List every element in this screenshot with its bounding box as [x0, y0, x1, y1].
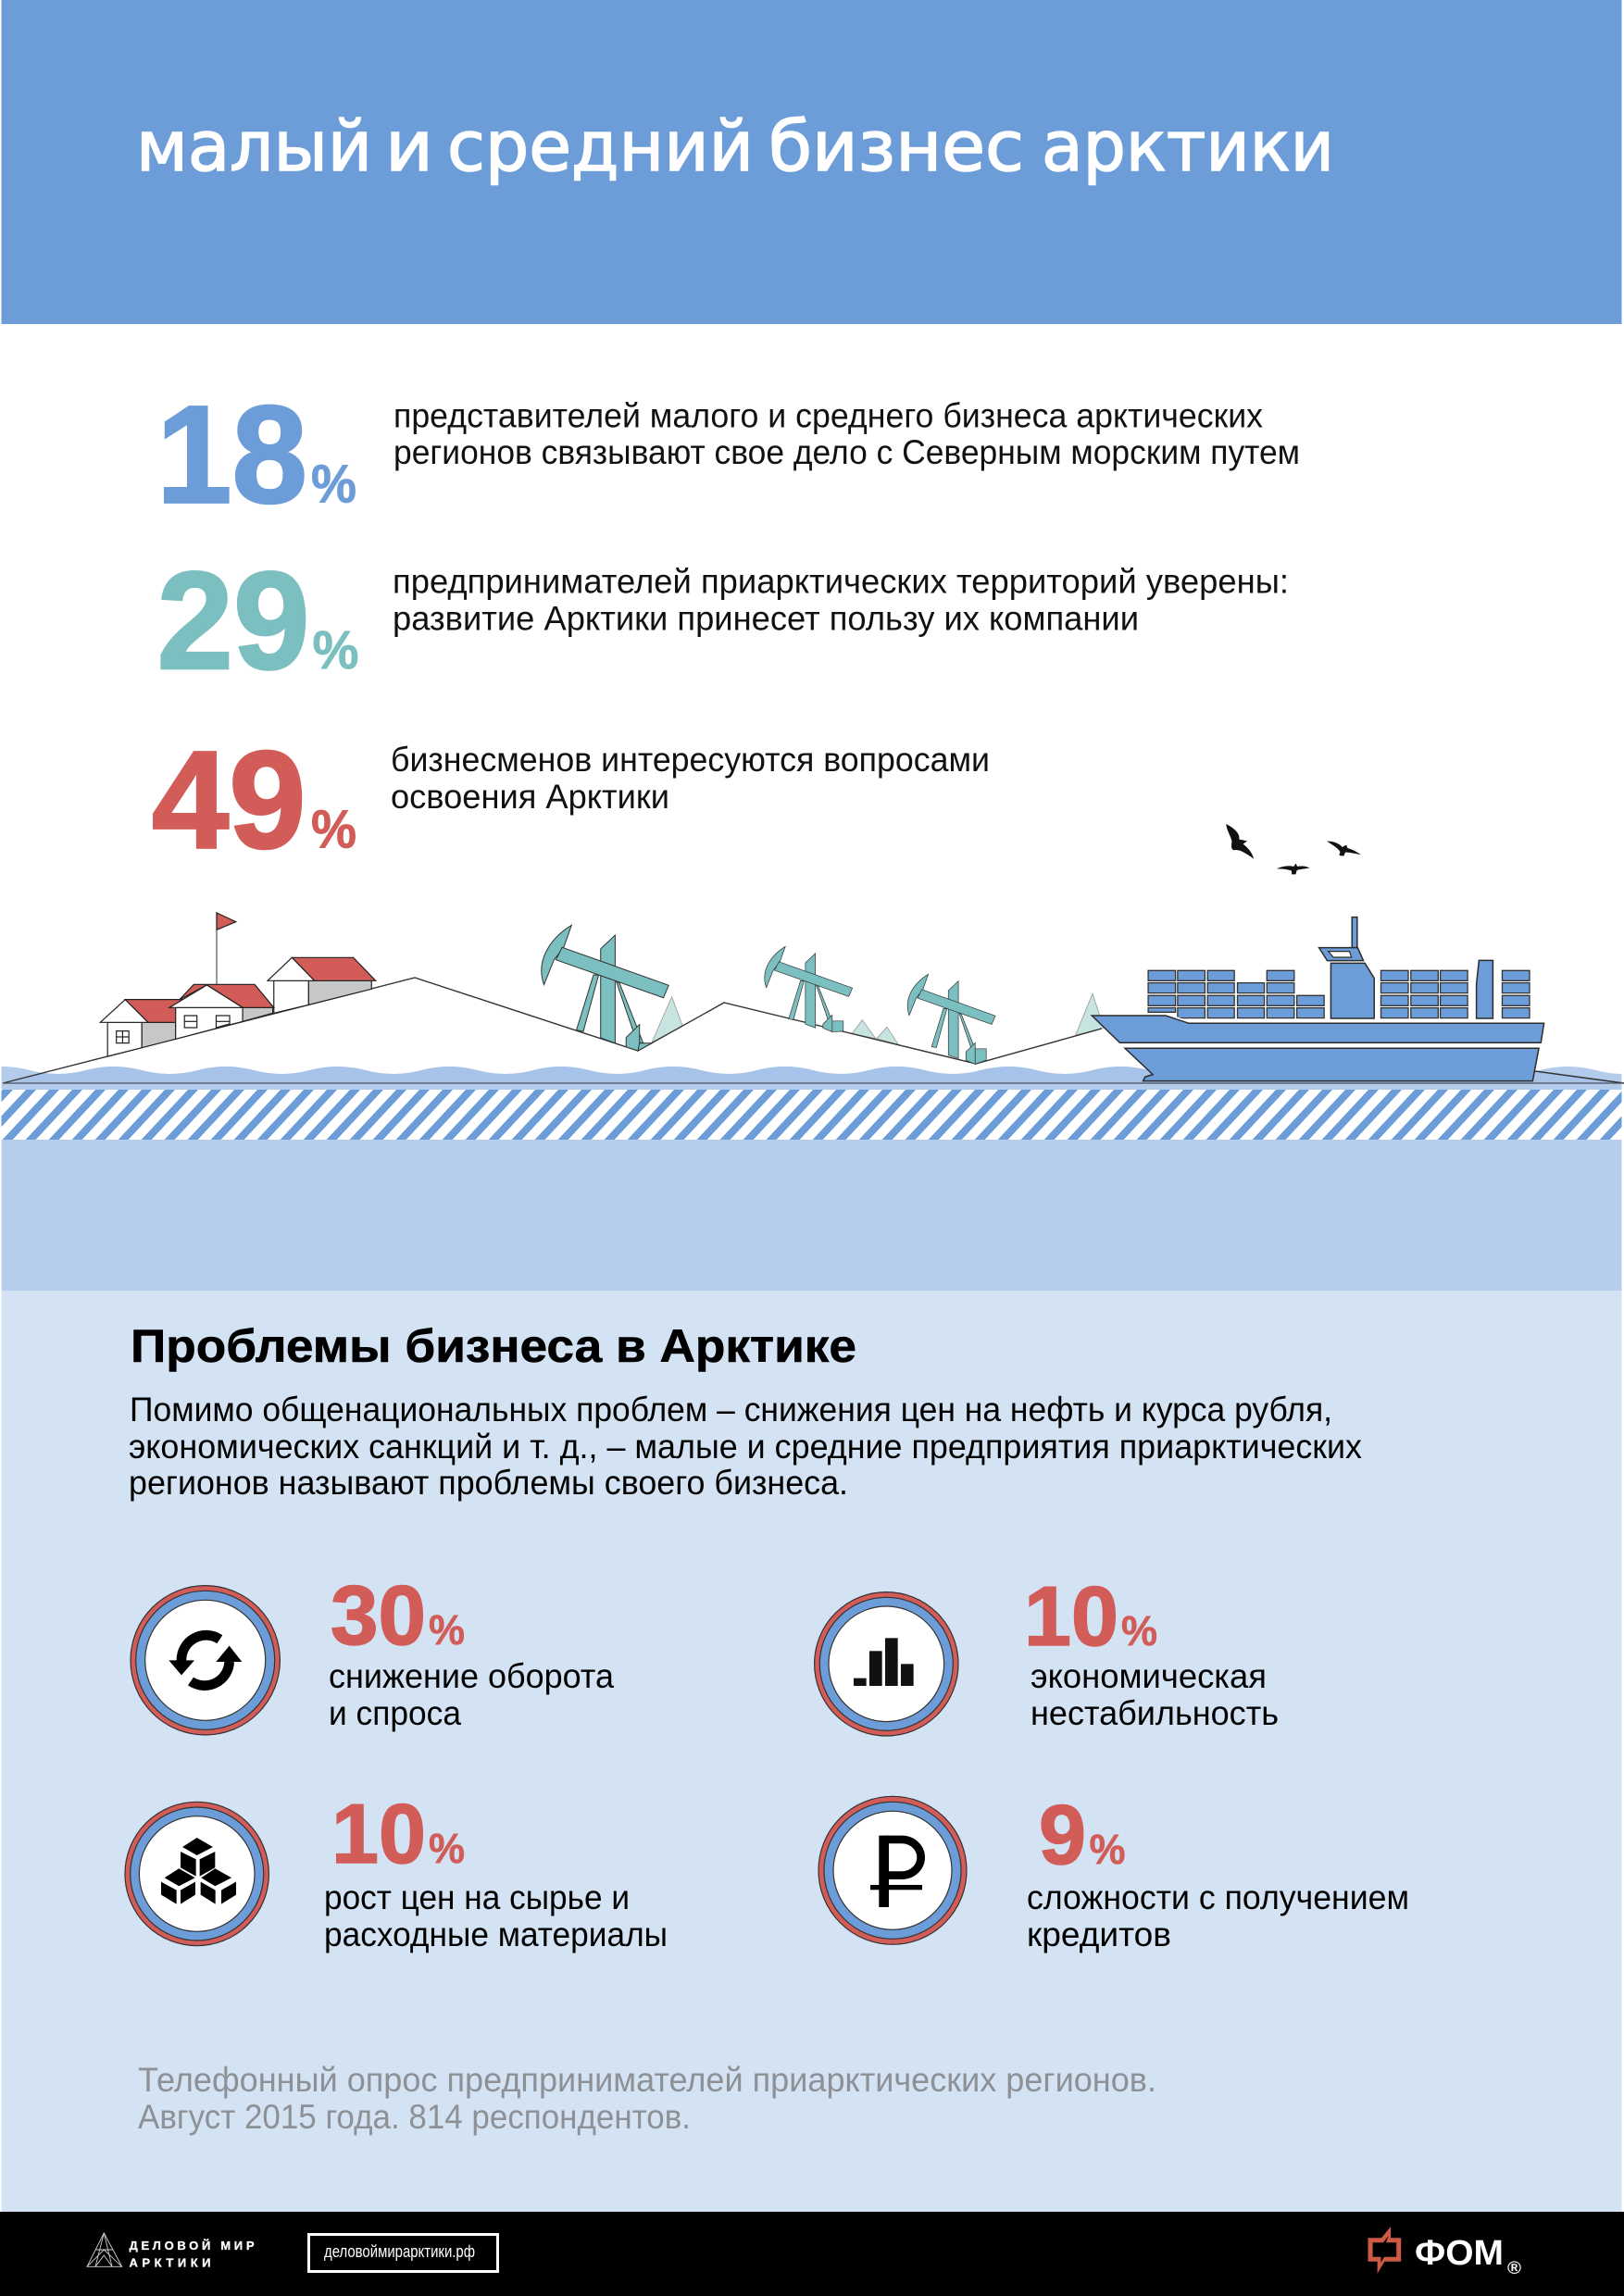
stat: 18 percent: 18	[156, 377, 307, 532]
stat: 29 percent: развитие Арктики принесет пользу их компании	[393, 599, 1139, 637]
problem: turnover: и спроса	[329, 1694, 461, 1732]
stat: 49 percent: %	[311, 800, 356, 860]
illustration: arctic landscape	[0, 824, 1624, 1291]
left house	[100, 1000, 181, 1056]
problem: credit: сложности с получением	[1027, 1878, 1409, 1916]
water waves	[0, 1067, 1624, 1090]
source note: Август 2015 года. 814 респондентов.	[138, 2098, 691, 2136]
logo: Delovoy Mir Arktiki: АРКТИКИ	[130, 2255, 211, 2269]
hill outline	[3, 978, 1102, 1083]
waterline	[3, 1082, 1624, 1084]
logo: Delovoy Mir Arktiki: ДЕЛОВОЙ МИР	[130, 2239, 255, 2252]
flag	[217, 912, 236, 985]
source note: Телефонный опрос предпринимателей приарктических регионов.	[138, 2061, 1156, 2099]
icon: cubes	[125, 1802, 269, 1946]
problem: raw materials: расходные материалы	[324, 1915, 668, 1953]
problem: credit: 9	[1039, 1789, 1086, 1882]
title: малый	[136, 106, 372, 187]
icon: FOM mark	[1368, 2227, 1401, 2274]
stat: 18 percent: представителей малого и среднего бизнеса арктических	[394, 397, 1263, 435]
problem: turnover: 30	[331, 1569, 426, 1663]
problem: credit: %	[1089, 1826, 1126, 1873]
section heading: Проблемы бизнеса в Арктике	[131, 1320, 856, 1372]
stat: 49 percent: 49	[152, 722, 306, 878]
source note	[138, 2061, 1156, 2136]
problem: turnover	[131, 1569, 614, 1735]
stat: 18 percent: регионов связывают свое дело с Северным морским путем	[394, 433, 1300, 471]
stat: 18 percent: %	[311, 455, 356, 515]
problem: raw materials: 10	[331, 1788, 426, 1881]
icebergs	[652, 993, 1104, 1044]
title	[136, 106, 1334, 187]
panel: business problems	[2, 1291, 1622, 2213]
oil pump 1	[542, 925, 668, 1051]
title: бизнес	[768, 106, 1024, 187]
problem: turnover: %	[429, 1606, 465, 1653]
stat: 29 percent: предпринимателей приарктических территорий уверены:	[393, 563, 1289, 600]
icon: ruble	[818, 1796, 967, 1944]
oil pump 2	[765, 946, 853, 1032]
problem: credit: кредитов	[1027, 1915, 1171, 1953]
stat: 49 percent	[152, 722, 990, 878]
houses and flag	[100, 912, 376, 1056]
footer	[0, 2212, 1624, 2296]
problem: economic instability: 10	[1024, 1570, 1118, 1664]
logo: FOM: ФОМ	[1415, 2234, 1504, 2273]
logo: Delovoy Mir Arktiki	[87, 2233, 255, 2269]
back house	[268, 957, 376, 1013]
problem: turnover: снижение оборота	[329, 1657, 614, 1695]
stat: 29 percent	[157, 543, 1289, 698]
stat: 49 percent: освоения Арктики	[391, 778, 669, 816]
website box	[309, 2235, 498, 2272]
problem: economic instability	[815, 1570, 1279, 1736]
sea band	[2, 1140, 1622, 1291]
title: средний	[447, 106, 754, 187]
icon: triangle mark	[87, 2233, 122, 2266]
logo: FOM	[1368, 2227, 1521, 2278]
stat: 29 percent: %	[313, 620, 359, 680]
problem: economic instability: экономическая	[1031, 1657, 1267, 1695]
middle house	[169, 984, 274, 1039]
title: и	[385, 106, 433, 187]
container ship	[1092, 917, 1544, 1081]
icon: bar chart	[815, 1592, 958, 1736]
oil pump 3	[907, 974, 995, 1064]
stat: 49 percent: бизнесменов интересуются вопросами	[391, 741, 990, 779]
hull	[1092, 1013, 1544, 1081]
stat: 18 percent	[156, 377, 1300, 532]
intro paragraph: Помимо общенациональных проблем – снижения цен на нефть и курса рубля,	[130, 1391, 1332, 1429]
stat: 29 percent: 29	[157, 543, 309, 698]
intro paragraph: экономических санкций и т. д., – малые и средние предприятия приарктических	[129, 1428, 1362, 1466]
problem: raw materials: %	[429, 1825, 465, 1872]
header band	[2, 0, 1622, 324]
intro paragraph: регионов называют проблемы своего бизнеса.	[129, 1464, 848, 1502]
striped band	[2, 1090, 1622, 1140]
icon: refresh arrows	[131, 1586, 280, 1735]
problem: raw materials: рост цен на сырье и	[324, 1878, 630, 1916]
superstructure	[1319, 917, 1493, 1018]
logo: FOM: ®	[1507, 2259, 1521, 2278]
birds	[1226, 824, 1361, 874]
containers	[1148, 970, 1530, 1018]
problem: raw materials	[125, 1788, 668, 1953]
website box: деловоймирарктики.рф	[324, 2242, 475, 2261]
intro paragraph	[129, 1391, 1362, 1502]
problem: economic instability: %	[1121, 1607, 1157, 1654]
title: арктики	[1042, 106, 1334, 187]
problem: economic instability: нестабильность	[1031, 1694, 1279, 1732]
problem: credit	[818, 1789, 1409, 1953]
